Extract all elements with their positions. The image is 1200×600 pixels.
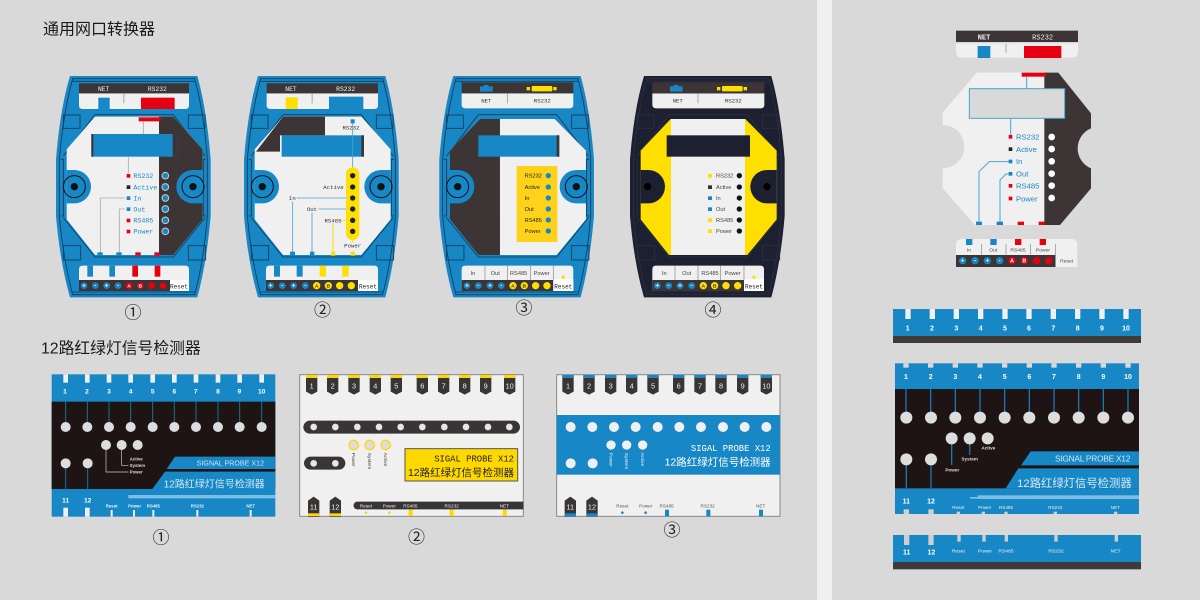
bottom connector strip [893, 535, 1141, 569]
signal probe 2: white with yellow: 7 [442, 382, 446, 391]
top notches [63, 374, 264, 383]
option numbers for converters: ④ [704, 301, 722, 320]
wiring and indicator column: In [289, 195, 296, 202]
header: NET [978, 34, 990, 42]
top connector strip: 9 [1100, 325, 1104, 332]
signal probe 3: white with blue band: 10 [762, 382, 770, 391]
bottom connector strip: 11 [903, 549, 910, 556]
main faceplate: 12路红绿灯信号检测器 [1017, 476, 1132, 490]
yellow indicator panel: Power [525, 229, 541, 235]
LCD window [282, 135, 364, 157]
terminal strip: - [668, 284, 670, 290]
indicator legend: RS232 [133, 172, 153, 180]
wiring and indicator column: Power [344, 243, 361, 250]
indicator legend [100, 121, 157, 253]
terminal strip: Out [491, 271, 500, 277]
faceplate: Active [1016, 145, 1037, 154]
main faceplate: Active [981, 446, 996, 451]
signal probe 3: white with blue band: 2 [587, 382, 591, 391]
terminal strip: - [999, 259, 1001, 265]
top connector strip: 10 [1122, 325, 1130, 332]
main faceplate: 7 [1052, 374, 1056, 381]
indicator legend: RS485 [716, 218, 733, 224]
main faceplate: Power [978, 505, 992, 510]
top connector strip: 1 [906, 325, 910, 332]
channel numbers: 2 [85, 389, 89, 396]
terminal strip: Power [534, 271, 550, 277]
yellow indicator panel: RS232 [525, 174, 542, 180]
vertical separator band [817, 0, 832, 600]
terminal strip: Out [682, 271, 692, 277]
yellow indicator panel [517, 166, 557, 242]
faceplate: In [1016, 157, 1022, 166]
terminal strip: - [304, 284, 306, 290]
yellow indicator panel: Active [525, 185, 540, 191]
signal probe 3: white with blue band: 4 [630, 382, 634, 391]
top connector strip: 6 [1027, 325, 1031, 332]
signal probe 3: white with blue band: 3 [609, 382, 613, 391]
main faceplate: Reset [952, 505, 965, 510]
channel numbers: 9 [237, 389, 241, 396]
signal probe 1: blue and dark: NET [246, 503, 255, 508]
option numbers for signal probes: ② [408, 528, 425, 547]
product name bands: 12路红绿灯信号检测器 [164, 477, 265, 490]
LCD window [667, 135, 750, 157]
terminal strip: Reset [554, 283, 572, 290]
signal probe 2: white with yellow: 4 [373, 382, 377, 391]
top connector strip: 2 [930, 325, 934, 332]
signal probe 3: white with blue band: Power [639, 503, 653, 508]
signal probe 2: white with yellow: 9 [484, 382, 488, 391]
faceplate: RS485 [1016, 182, 1039, 191]
signal probe 3: white with blue band: 8 [719, 382, 723, 391]
terminal strip: A [702, 284, 706, 290]
signal probe 3: white with blue band: NET [756, 503, 765, 508]
channel numbers: 8 [216, 389, 220, 396]
yellow indicator panel: Out [525, 207, 534, 213]
terminal strip: - [477, 284, 479, 290]
signal probe 2: white with yellow: 5 [394, 382, 398, 391]
terminal strip: In [471, 271, 475, 277]
wiring and indicator column [289, 119, 361, 256]
indicator LEDs [162, 172, 169, 235]
yellow product label [405, 449, 518, 481]
device 2: blue converter with yellow accents [244, 76, 399, 297]
terminal strip: + [269, 284, 273, 290]
option numbers for signal probes: ① [152, 528, 170, 548]
port bar: Power [383, 503, 396, 508]
signal probe 3: white with blue band: 12 [588, 502, 596, 511]
channel numbers: 6 [172, 389, 176, 396]
top connector strip [893, 309, 1141, 343]
yellow product label: 12路红绿灯信号检测器 [408, 466, 515, 479]
top connector panel [652, 82, 764, 108]
LED pills [303, 421, 520, 470]
indicator legend: RS485 [133, 217, 153, 225]
signal probe 1: blue and dark: Reset [106, 503, 118, 508]
top connector panel: NET [98, 86, 110, 93]
terminal strip: B [713, 284, 717, 290]
main faceplate [895, 363, 1139, 514]
terminal strip: - [500, 284, 502, 290]
terminal strip: - [281, 284, 283, 290]
signal probe 3: white with blue band: RS485 [660, 503, 674, 508]
terminal strip: Reset [170, 283, 188, 290]
signal probe 2: white with yellow: Power [350, 453, 356, 467]
right column: signal probe exploded view [893, 309, 1141, 569]
wiring and indicator column: RS232 [343, 124, 359, 131]
top connector panel: NET [285, 86, 297, 93]
main faceplate: SIGNAL PROBE X12 [1055, 454, 1131, 464]
terminal strip: Reset [745, 283, 763, 290]
heading: 12-channel traffic light signal detector: 12路红绿灯信号检测器 [41, 340, 201, 358]
header: RS232 [1032, 34, 1053, 42]
terminal strip: + [656, 284, 660, 290]
indicator legend: Active [716, 185, 731, 191]
terminal strip: RS485 [510, 271, 527, 277]
terminal strip: In [662, 271, 667, 277]
wiring and indicator column: RS485 [325, 217, 342, 224]
signal probe 3: white with blue band: 6 [677, 382, 681, 391]
terminal strip: In [967, 248, 971, 254]
terminal strip: Out [989, 248, 998, 254]
signal probe 3: white with blue band: 1 [566, 382, 570, 391]
LCD window [91, 134, 177, 157]
signal probe 2: white with yellow: 6 [420, 382, 424, 391]
faceplate [943, 73, 1091, 225]
signal probe 2: white with yellow: System [366, 453, 372, 469]
terminal strip: + [465, 284, 469, 290]
option numbers for converters: ① [124, 304, 142, 322]
wiring and indicator column: Out [307, 206, 317, 213]
terminal strip: + [292, 284, 296, 290]
channel numbers: 4 [129, 389, 133, 396]
top connector panel [462, 82, 573, 108]
signal probe 1: blue and dark: Power [128, 503, 141, 508]
header [956, 31, 1078, 58]
option numbers for converters: ② [314, 301, 331, 320]
probe lines [66, 402, 262, 489]
indicator legend: In [716, 196, 721, 202]
main faceplate: 4 [978, 374, 982, 381]
option numbers for converters: ③ [516, 299, 532, 318]
terminal strip: Reset [359, 283, 377, 290]
top connector panel: RS232 [336, 86, 355, 93]
bottom connector strip: 12 [927, 549, 935, 556]
main faceplate: Power [945, 467, 960, 472]
main faceplate: 1 [904, 374, 908, 381]
terminal strip: + [488, 284, 492, 290]
indicator legend: Active [133, 183, 157, 191]
product name [665, 444, 771, 469]
signal probe 1: blue and dark [52, 374, 275, 517]
terminal strip: A [511, 284, 515, 290]
channel numbers: 1 [63, 389, 67, 396]
signal probe 3: white with blue band: 9 [741, 382, 745, 391]
terminal strip: + [82, 284, 86, 290]
top connector panel: RS232 [148, 86, 167, 93]
top connector panel: RS232 [725, 98, 742, 105]
bottom connector strip: RS232 [1048, 549, 1064, 555]
terminal tags [306, 375, 515, 517]
terminal strip: + [678, 284, 682, 290]
terminal strip: A [127, 284, 131, 290]
LED holes [61, 422, 267, 468]
bottom connector strip: Reset [952, 549, 965, 555]
top connector strip: 4 [979, 325, 983, 332]
signal probe 2: white with yellow: 3 [352, 382, 356, 391]
signal probe 3: white with blue band: RS232 [701, 503, 715, 508]
wiring and indicator column: Active [323, 184, 344, 191]
channel numbers: 12 [84, 497, 92, 504]
terminal strip: Reset [1060, 259, 1074, 265]
top connector panel [79, 83, 189, 109]
terminal strip [462, 266, 573, 291]
bottom connector strip: RS485 [998, 549, 1014, 555]
main faceplate: 2 [929, 374, 933, 381]
terminal strip: B [139, 284, 143, 290]
channel numbers: 5 [151, 389, 155, 396]
indicator legend: Power [716, 229, 732, 235]
terminal strip: Power [725, 271, 741, 277]
faceplate: Power [1016, 194, 1038, 203]
terminal strip: Power [1036, 248, 1050, 254]
signal probe 1: blue and dark: RS485 [147, 503, 161, 508]
LCD window [478, 135, 559, 157]
main faceplate: 9 [1101, 374, 1105, 381]
indicator legend [708, 173, 742, 235]
terminal strip [266, 266, 378, 291]
yellow indicator panel: In [525, 196, 529, 202]
LED holes [566, 422, 771, 468]
option numbers for signal probes [152, 521, 680, 548]
signal probe 2: white with yellow: Active [382, 453, 388, 466]
signal probe 3: white with blue band: Reset [616, 503, 629, 508]
signal probe 1: blue and dark: Active [130, 456, 143, 461]
terminal strip [956, 239, 1077, 267]
port bar [353, 502, 523, 516]
signal probe 3: white with blue band: 7 [698, 382, 702, 391]
signal probe 2: white with yellow: 10 [506, 382, 514, 391]
port bar: RS485 [403, 503, 418, 508]
bottom connector strip: Power [978, 549, 992, 555]
option numbers for signal probes: ③ [664, 521, 680, 540]
top connector panel [267, 83, 378, 109]
terminal strip: A [315, 284, 319, 290]
main faceplate: System [961, 457, 978, 462]
top connector strip: 8 [1076, 325, 1080, 332]
main faceplate: 12 [927, 499, 935, 506]
terminal strip: RS485 [701, 271, 719, 277]
main faceplate: 3 [953, 374, 957, 381]
terminal strip: - [974, 259, 976, 265]
product name bands: SIGNAL PROBE X12 [197, 461, 264, 468]
signal probe 2: white with yellow: 8 [463, 382, 467, 391]
terminal strip: - [94, 284, 96, 290]
channel numbers: 3 [107, 389, 111, 396]
yellow product label: SIGAL PROBE X12 [434, 454, 514, 464]
faceplate: RS232 [1016, 133, 1039, 142]
main faceplate: 11 [903, 499, 910, 506]
faceplate: Out [1016, 170, 1029, 179]
signal probe 1: blue and dark: RS232 [191, 503, 205, 508]
top connector panel: NET [673, 98, 683, 105]
signal probe 2: white with yellow [300, 375, 523, 517]
terminal strip: + [986, 259, 990, 265]
channel numbers [62, 389, 266, 504]
device 3: blue converter with side panel [439, 76, 594, 297]
top connector panel: NET [481, 98, 492, 105]
main faceplate: NET [1111, 505, 1120, 510]
signal probe 1: blue and dark: System [130, 463, 145, 468]
indicator legend: Out [716, 207, 726, 213]
indicator legend: RS232 [716, 174, 733, 180]
indicator legend: In [133, 194, 141, 202]
channel numbers: 7 [194, 389, 198, 396]
top connector panel: RS232 [534, 98, 551, 105]
terminal strip: B [522, 284, 526, 290]
main faceplate: 8 [1077, 374, 1081, 381]
yellow indicator panel: RS485 [525, 218, 542, 224]
terminal strip [652, 266, 764, 291]
top connector strip: 5 [1003, 325, 1007, 332]
terminal strip: + [105, 284, 109, 290]
terminal strip: - [117, 284, 119, 290]
indicator legend: Out [133, 205, 145, 213]
right column: converter exploded view [943, 31, 1091, 267]
main faceplate: RS485 [999, 505, 1014, 510]
main faceplate: 10 [1124, 374, 1132, 381]
device 4: dark converter with yellow panels [630, 76, 785, 297]
product name bands [152, 457, 275, 490]
port bar: Reset [360, 503, 373, 508]
channel numbers: 10 [258, 389, 266, 396]
terminal strip: RS485 [1010, 248, 1026, 254]
signal probe 2: white with yellow: 2 [331, 382, 335, 391]
terminal tags [562, 375, 772, 517]
port bar: NET [500, 503, 509, 508]
signal probe 3: white with blue band [557, 375, 780, 517]
terminal strip [79, 266, 189, 291]
signal probe 3: white with blue band: 11 [567, 502, 574, 511]
channel numbers: 11 [62, 497, 69, 504]
device 1: blue converter [56, 76, 211, 297]
signal probe 3: white with blue band: Active [639, 453, 645, 466]
signal probe 3: white with blue band: 5 [651, 382, 655, 391]
main faceplate: 5 [1003, 374, 1007, 381]
signal probe 3: white with blue band: Power [607, 453, 613, 467]
option numbers for converters [124, 299, 722, 322]
port bar: RS232 [445, 503, 459, 508]
terminal strip: - [691, 284, 693, 290]
signal probe 2: white with yellow: 12 [331, 502, 339, 511]
terminal strip: B [327, 284, 331, 290]
terminal strip: B [1022, 259, 1026, 265]
bottom connector strip: NET [1111, 549, 1121, 555]
main faceplate: 6 [1027, 374, 1031, 381]
indicator legend: Power [133, 228, 153, 236]
signal probe 2: white with yellow: 11 [310, 502, 317, 511]
top connector strip: 7 [1051, 325, 1055, 332]
terminal strip: A [1010, 259, 1014, 265]
top connector strip: 3 [954, 325, 958, 332]
signal probe 2: white with yellow: 1 [310, 382, 314, 391]
terminal strip: + [961, 259, 965, 265]
signal probe 3: white with blue band: System [623, 453, 629, 469]
product name: SIGAL PROBE X12 [691, 444, 771, 454]
main faceplate: RS232 [1048, 505, 1063, 510]
signal probe 1: blue and dark: Power [130, 470, 143, 475]
heading: universal network port converter: 通用网口转换器 [43, 20, 155, 38]
product name: 12路红绿灯信号检测器 [665, 456, 771, 469]
